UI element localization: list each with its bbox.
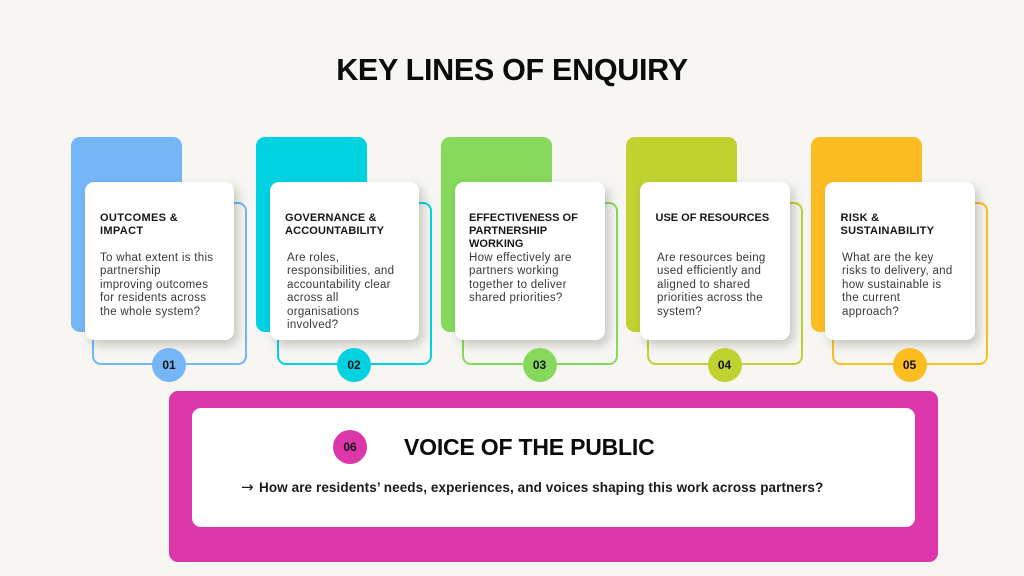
text 04: priorities across the bbox=[657, 292, 763, 304]
number 06: 06 bbox=[343, 440, 357, 454]
text 03: together to deliver bbox=[469, 279, 567, 291]
outline frame 01 bbox=[92, 202, 247, 365]
heading 03: WORKING bbox=[469, 238, 523, 250]
text 04: system? bbox=[657, 306, 702, 318]
panel: effectiveness of partnership working bbox=[441, 137, 618, 382]
card 04 bbox=[640, 182, 790, 340]
number 02 bbox=[337, 348, 371, 382]
heading 01: OUTCOMES & bbox=[100, 212, 178, 224]
text 02: involved? bbox=[287, 319, 338, 331]
heading 01: IMPACT bbox=[100, 225, 143, 237]
text 04: aligned to shared bbox=[657, 279, 750, 291]
number 05 bbox=[892, 348, 926, 382]
title: KEY LINES OF ENQUIRY bbox=[336, 53, 688, 87]
heading 05: RISK & bbox=[840, 212, 879, 224]
number 01 bbox=[152, 348, 186, 382]
question text: How are residents’ needs, experiences, and voices shaping this work across partners? bbox=[259, 480, 823, 494]
number 04: 04 bbox=[718, 358, 731, 372]
outline frame 05 bbox=[832, 202, 988, 365]
panel: voice of the public bbox=[169, 391, 938, 562]
text 03 bbox=[469, 252, 572, 304]
number 05: 05 bbox=[903, 358, 916, 372]
heading 01 bbox=[100, 212, 178, 237]
number 03: 03 bbox=[533, 358, 546, 372]
panel: use of resources bbox=[626, 137, 803, 382]
text 03: shared priorities? bbox=[469, 292, 563, 304]
text 05: approach? bbox=[842, 306, 899, 318]
text 05 bbox=[842, 252, 953, 318]
panel: risk and sustainability bbox=[811, 137, 988, 382]
card 01 bbox=[84, 182, 234, 340]
outline frame 03 bbox=[462, 202, 618, 365]
card 05 bbox=[825, 182, 974, 340]
heading 03 bbox=[469, 212, 578, 250]
text 05: risks to delivery, and bbox=[842, 265, 953, 277]
text 01: the whole system? bbox=[100, 306, 200, 318]
coloured back panel 04 bbox=[626, 137, 737, 332]
number 04 bbox=[708, 348, 742, 382]
panel: governance and accountability bbox=[256, 137, 432, 382]
question text: → bbox=[241, 478, 254, 496]
panel: outcomes and impact bbox=[71, 137, 247, 382]
text 02: Are roles, bbox=[287, 252, 339, 264]
text 01: for residents across bbox=[100, 292, 206, 304]
outline frame 04 bbox=[647, 202, 802, 365]
number 03 bbox=[522, 348, 556, 382]
outline frame 02 bbox=[276, 202, 432, 365]
text 05: how sustainable is bbox=[842, 279, 941, 291]
text 01: To what extent is this bbox=[100, 252, 213, 264]
heading 05 bbox=[840, 212, 934, 237]
white inner card bbox=[192, 408, 915, 527]
heading 02 bbox=[285, 212, 384, 237]
text 01: partnership bbox=[100, 265, 161, 277]
text 02: accountability clear bbox=[287, 279, 391, 291]
text 02: across all bbox=[287, 292, 339, 304]
number 01: 01 bbox=[162, 358, 176, 372]
heading 02: ACCOUNTABILITY bbox=[285, 225, 384, 237]
text 03: partners working bbox=[469, 265, 559, 277]
heading 03: EFFECTIVENESS OF bbox=[469, 212, 578, 224]
text 05: the current bbox=[842, 292, 900, 304]
card 02 bbox=[270, 182, 419, 340]
coloured back panel 02 bbox=[256, 137, 366, 332]
text 04: Are resources being bbox=[657, 252, 766, 264]
text 02 bbox=[287, 252, 394, 331]
text 01 bbox=[100, 252, 213, 318]
text 05: What are the key bbox=[842, 252, 934, 264]
text 04: used efficiently and bbox=[657, 265, 761, 277]
text 01: improving outcomes bbox=[100, 279, 208, 291]
number 06 bbox=[333, 430, 367, 464]
heading 03: PARTNERSHIP bbox=[469, 225, 547, 237]
heading 02: GOVERNANCE & bbox=[285, 212, 377, 224]
text 02: organisations bbox=[287, 306, 359, 318]
coloured back panel 05 bbox=[811, 137, 922, 332]
card 03 bbox=[455, 182, 604, 340]
text 04 bbox=[657, 252, 766, 318]
text 03: How effectively are bbox=[469, 252, 572, 264]
heading 04: USE OF RESOURCES bbox=[656, 212, 769, 224]
heading 06: VOICE OF THE PUBLIC bbox=[404, 434, 654, 460]
text 02: responsibilities, and bbox=[287, 265, 394, 277]
heading 05: SUSTAINABILITY bbox=[840, 225, 934, 237]
number 02: 02 bbox=[347, 358, 361, 372]
coloured back panel 03 bbox=[441, 137, 552, 332]
coloured back panel 01 bbox=[70, 137, 182, 332]
